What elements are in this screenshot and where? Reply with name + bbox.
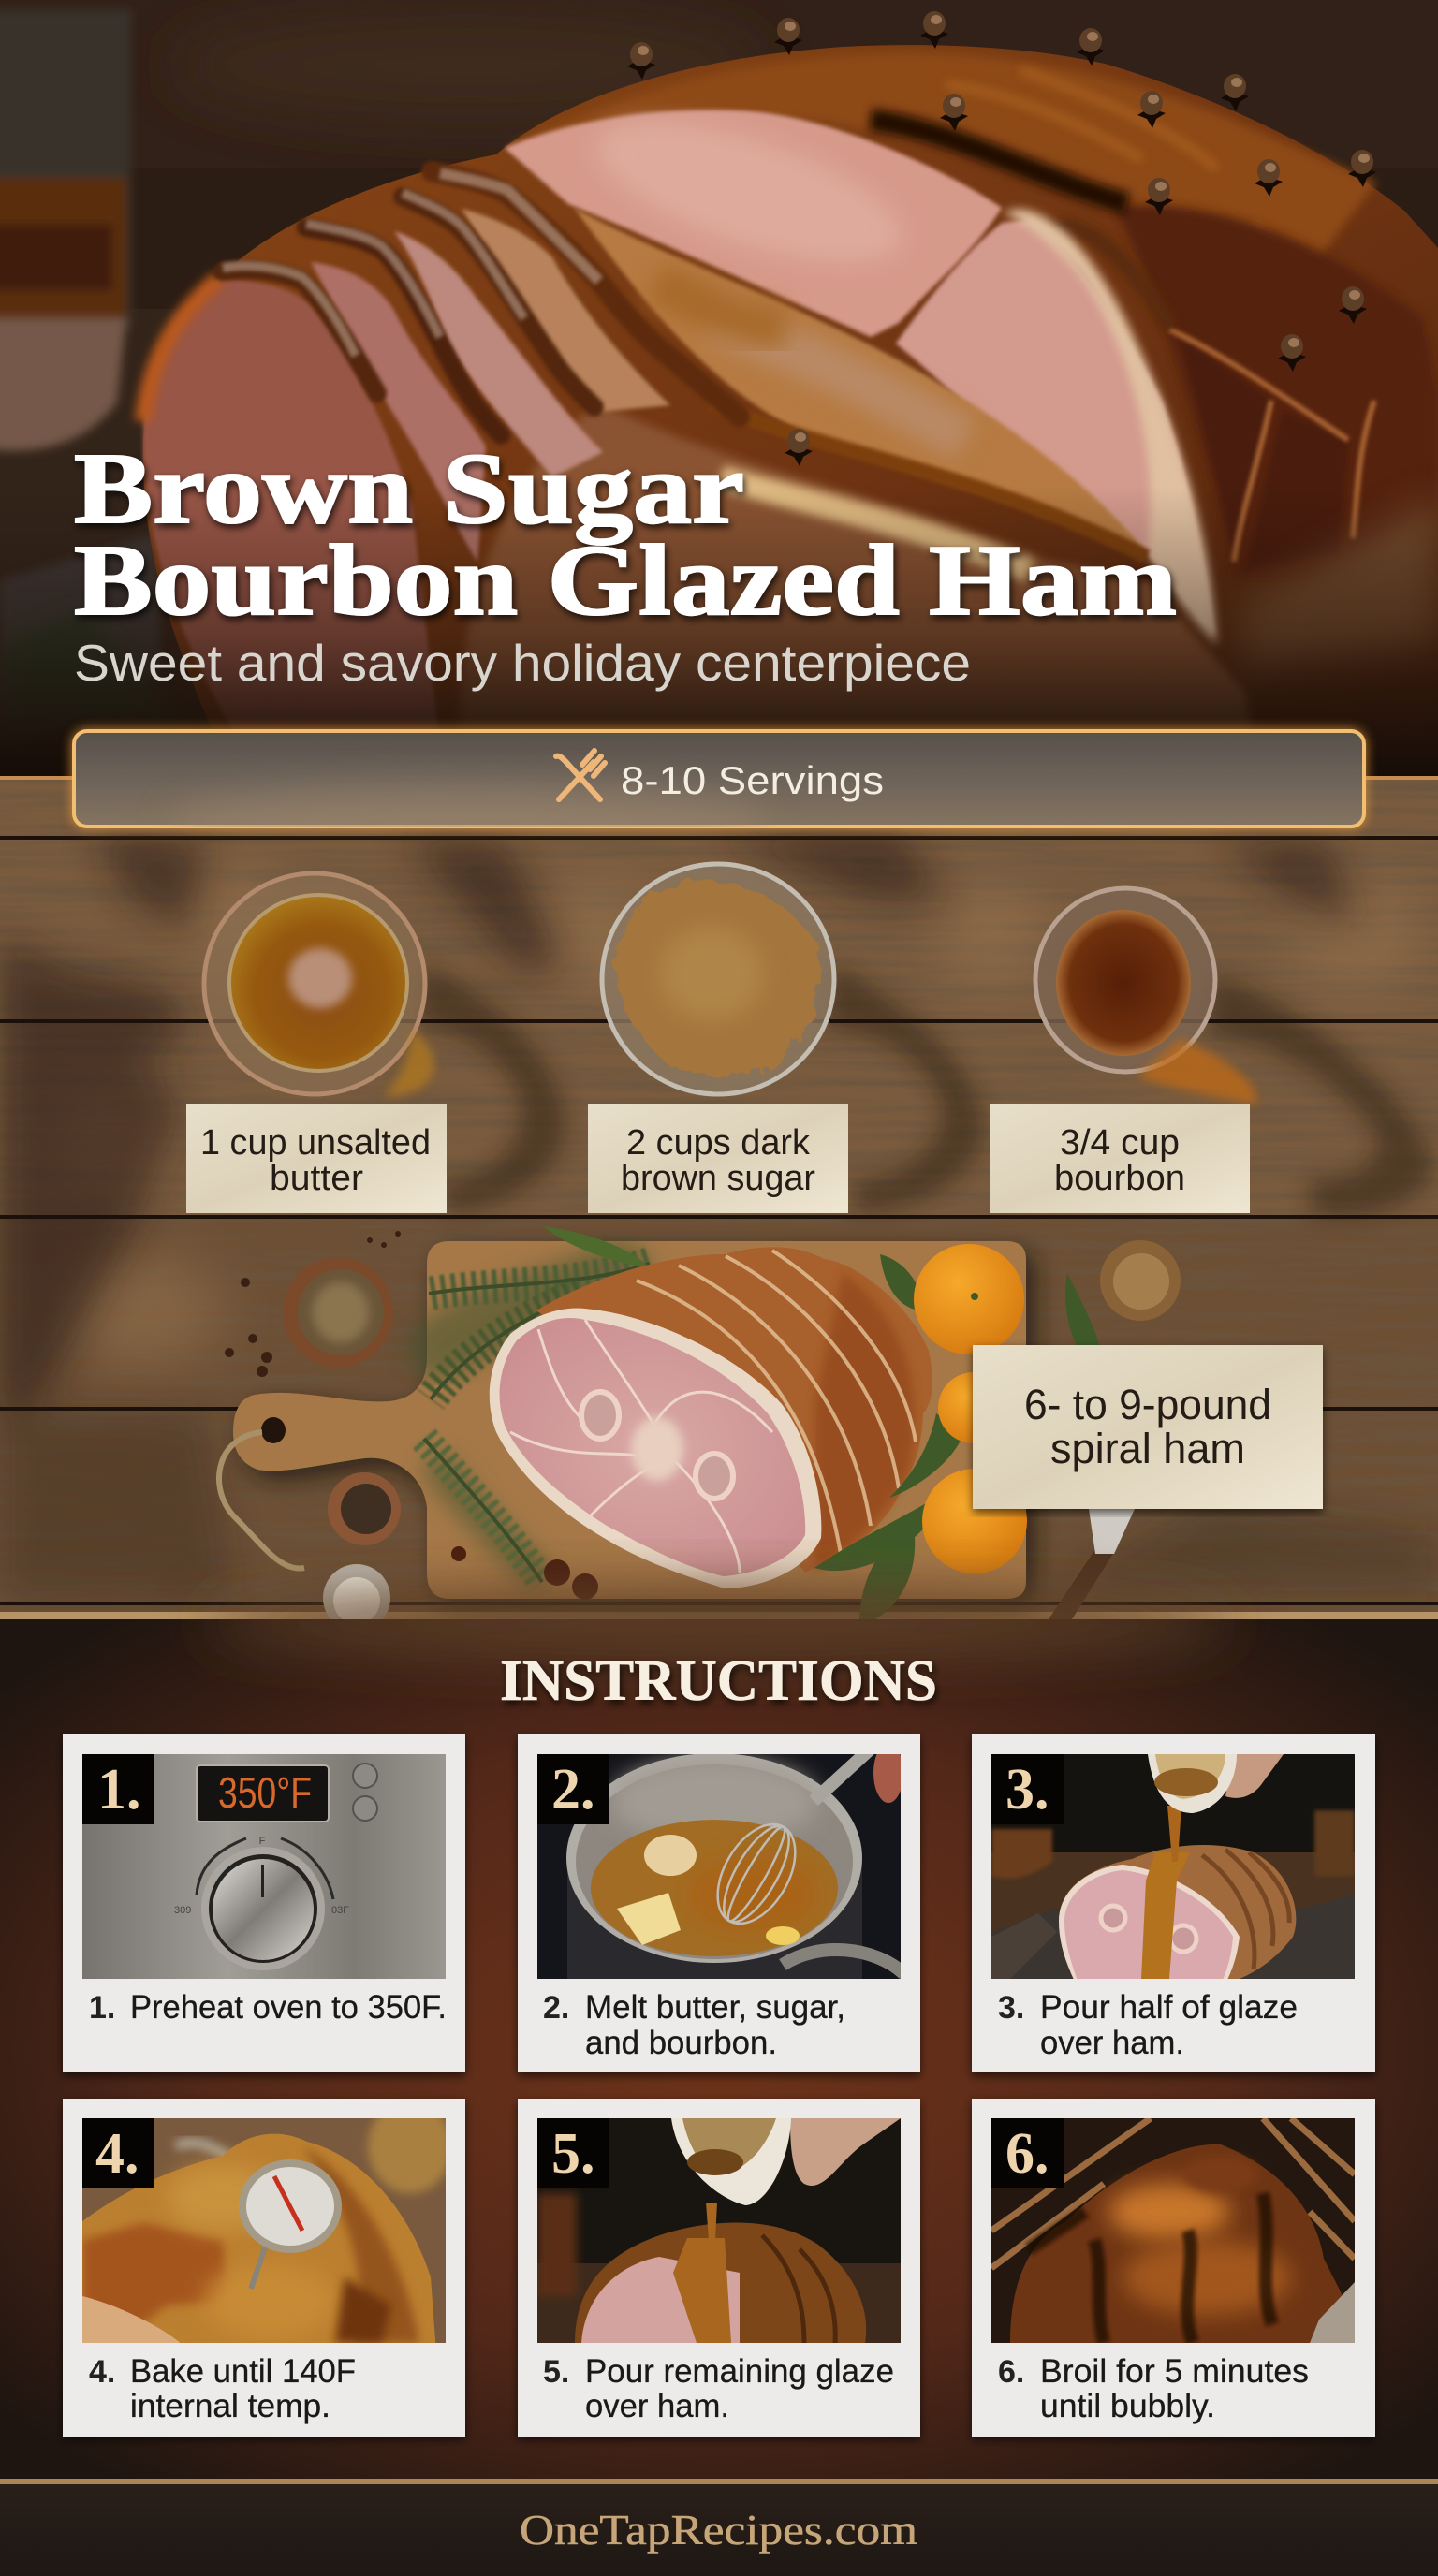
leaves [814, 1254, 964, 1624]
instructions panel [0, 1591, 1438, 2481]
step 2 text: 2. [543, 1990, 569, 2026]
step 4 text: Bake until 140F [130, 2353, 356, 2390]
step 6 text [998, 2353, 1309, 2424]
ingredient label: bourbon: 3/4 cup [1060, 1123, 1180, 1163]
ingredient label: butter: butter [270, 1159, 363, 1198]
ingredient: butter bowl [204, 873, 434, 1097]
whiskey glass [0, 9, 131, 450]
step 5 text: over ham. [585, 2388, 729, 2424]
step 6 text: until bubbly. [1040, 2388, 1215, 2424]
step 3 text: Pour half of glaze [1040, 1989, 1298, 2026]
ingredient: bourbon glass [1035, 888, 1256, 1105]
step 5 number: 5. [551, 2122, 595, 2186]
step 3 text [998, 1989, 1298, 2061]
step 2 number: 2. [551, 1758, 595, 1822]
right lattice crust [1114, 205, 1438, 580]
step 4 text: internal temp. [130, 2388, 330, 2424]
step 1 number [82, 1754, 154, 1824]
rosemary sprigs [424, 1264, 650, 1582]
step 1 text: Preheat oven to 350F. [130, 1989, 447, 2026]
step 1 card: 309 [174, 1905, 191, 1916]
ingredient label: bourbon: bourbon [1054, 1159, 1185, 1198]
ham size label: spiral ham [1050, 1425, 1245, 1472]
ingredients wood panel [0, 777, 1438, 1619]
ham body [143, 45, 1438, 779]
ingredient label: sugar: 2 cups dark [626, 1123, 811, 1163]
step 2 text [543, 1989, 845, 2061]
hero photo: glazed ham [0, 0, 1438, 805]
step 1 number: 1. [97, 1758, 140, 1822]
ham crust [536, 1247, 932, 1573]
step 4 card [63, 2099, 465, 2437]
step 2 number [537, 1754, 609, 1824]
step 3 card [972, 1734, 1375, 2072]
left ham slices [143, 278, 440, 749]
step 6 card [972, 2099, 1375, 2437]
servings banner [0, 731, 1438, 861]
title: Brown Sugar [74, 433, 744, 545]
step 1 card [63, 1734, 465, 2072]
ham size label: 6- to 9-pound [1024, 1381, 1271, 1428]
step 5 text [543, 2353, 894, 2424]
step 4 number: 4. [95, 2122, 139, 2186]
footer bar: OneTapRecipes.com [520, 2506, 917, 2554]
dappled leaf shadows [0, 833, 1438, 1601]
ingredient: brown sugar bowl [602, 864, 834, 1094]
cloves [627, 11, 1376, 466]
ham cut face [490, 1308, 821, 1588]
step 3 text: 3. [998, 1990, 1024, 2026]
step 4 number [82, 2118, 154, 2188]
step 6 text: 6. [998, 2354, 1024, 2390]
ingredient label: bourbon [990, 1104, 1250, 1213]
step 6 text: Broil for 5 minutes [1040, 2353, 1309, 2390]
servings text: 8-10 Servings [621, 758, 884, 802]
step 3 text: over ham. [1040, 2025, 1184, 2061]
title: Bourbon Glazed Ham [74, 525, 1177, 637]
oranges [914, 1244, 1027, 1573]
step 5 text: 5. [543, 2354, 569, 2390]
footer bar [0, 2479, 1438, 2576]
pink meat, lower slice [896, 219, 1215, 635]
step 1 card: F [259, 1836, 266, 1847]
dark glaze seam [871, 120, 1127, 204]
step 1 card: 03F [331, 1905, 349, 1916]
step 5 card [518, 2099, 920, 2437]
step 5 number [537, 2118, 609, 2188]
icon: fork and knife [556, 751, 605, 799]
bowl crescent shadows [418, 964, 1432, 1216]
step 6 number: 6. [1005, 2122, 1049, 2186]
step 4 text [89, 2353, 356, 2424]
step 6 number [991, 2118, 1064, 2188]
ingredient label: sugar: brown sugar [621, 1159, 815, 1198]
star anise and cloves on board [451, 1546, 598, 1600]
step 1 text: 1. [89, 1990, 115, 2026]
small spice bowls [225, 1231, 1181, 1632]
glaze sparkle on slices [223, 173, 599, 356]
subtitle: Sweet and savory holiday centerpiece [74, 634, 971, 692]
ingredient label: butter [186, 1104, 447, 1213]
lower tan fat [462, 410, 1247, 724]
step 2 card [518, 1734, 920, 2072]
title [74, 433, 1177, 637]
step 3 number: 3. [1005, 1758, 1049, 1822]
step 2 text: Melt butter, sugar, [585, 1989, 845, 2026]
pink meat, upper slice [505, 110, 1002, 337]
instructions heading: INSTRUCTIONS [500, 1649, 937, 1713]
plank gaps [0, 836, 1438, 1605]
ham size label [973, 1345, 1323, 1509]
step 3 number [991, 1754, 1064, 1824]
warm light patches [56, 871, 1423, 1367]
cream fat edge [1004, 210, 1217, 646]
orange flap slice [574, 208, 1147, 553]
step 4 text: 4. [89, 2354, 115, 2390]
step 5 text: Pour remaining glaze [585, 2353, 894, 2390]
step 1 card: 350°F [218, 1768, 312, 1817]
cutting board with spiral ham [219, 1226, 1035, 1624]
step 2 text: and bourbon. [585, 2025, 777, 2061]
ingredient label: sugar [588, 1104, 848, 1213]
ingredient label: butter: 1 cup unsalted [200, 1123, 431, 1163]
